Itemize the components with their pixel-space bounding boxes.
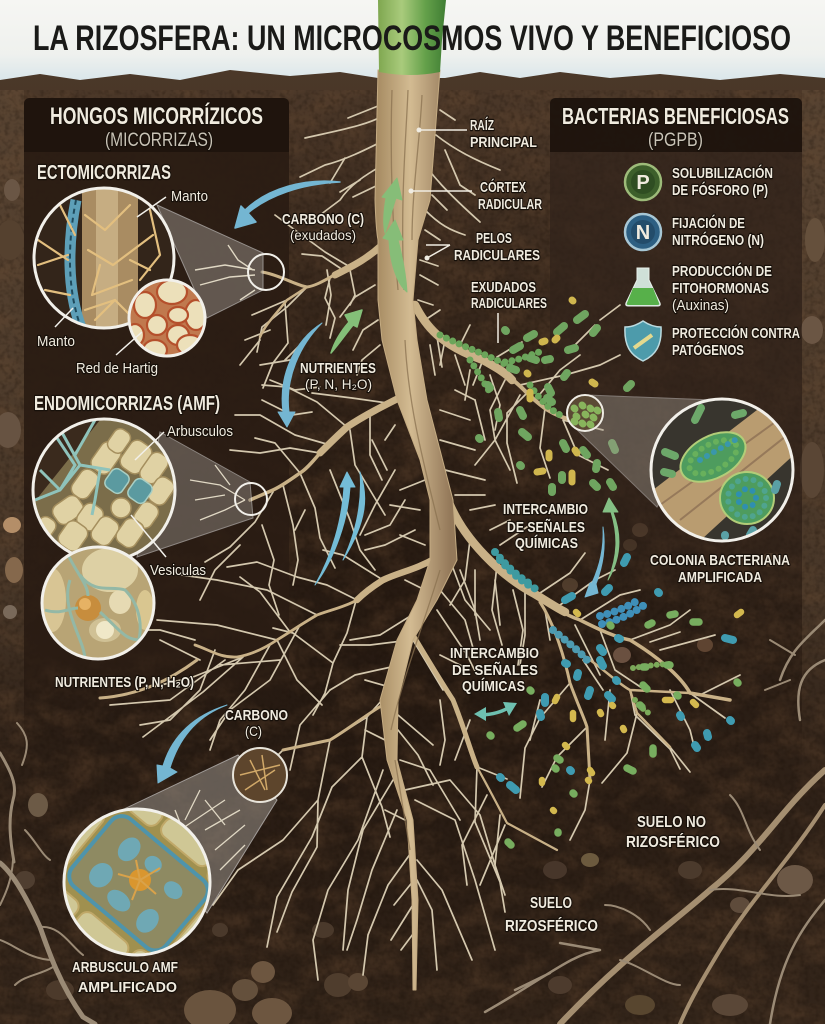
background: sky bbox=[0, 0, 825, 90]
bacteria panel heading bbox=[562, 103, 789, 151]
fungi panel heading bbox=[50, 102, 263, 151]
label: raíz principal bbox=[470, 117, 537, 151]
callouts: ectomicorrizas: Red de Hartig bbox=[76, 361, 158, 377]
root callouts bbox=[408, 128, 498, 343]
label: nutrientes centro: (P, N, H₂O) bbox=[305, 376, 372, 392]
text: fijación: FIJACIÓN DE bbox=[672, 214, 745, 232]
label: suelo rizosférico bbox=[505, 895, 598, 935]
plant stem bbox=[378, 0, 446, 75]
zoom cone: ectomicorrizas bbox=[157, 205, 263, 318]
text: solubilización: DE FÓSFORO (P) bbox=[672, 181, 768, 199]
icon: nitrógeno: N bbox=[636, 222, 650, 244]
label: córtex radicular bbox=[478, 178, 542, 213]
label: suelo no rizosférico: RIZOSFÉRICO bbox=[626, 832, 720, 851]
icon: escudo bbox=[625, 321, 661, 361]
text: fitohormonas bbox=[672, 262, 772, 314]
heading: ectomicorrizas: ECTOMICORRIZAS bbox=[37, 162, 171, 184]
arrow: carbono inferior bbox=[157, 705, 227, 783]
magnifier: vesículas bbox=[38, 547, 154, 660]
zoom cone: colonia bacteriana bbox=[570, 395, 713, 507]
label: intercambio 1: QUÍMICAS bbox=[515, 535, 578, 552]
taproot bbox=[375, 70, 457, 990]
magnifier: root mantle bbox=[34, 185, 174, 335]
panel: bacterias beneficiosas bbox=[550, 98, 802, 608]
text: solubilización: SOLUBILIZACIÓN bbox=[672, 164, 773, 182]
label: raíz principal: RAÍZ bbox=[470, 117, 494, 134]
label: nutrientes: NUTRIENTES (P, N, H₂O) bbox=[55, 674, 194, 691]
label: carbono inferior: (C) bbox=[245, 723, 262, 739]
label: carbono exudados: (exudados) bbox=[290, 227, 356, 243]
text: fijación bbox=[672, 214, 764, 249]
icon: nitrógeno bbox=[625, 214, 661, 250]
icon: fósforo bbox=[625, 164, 661, 200]
label: colonia bacteriana bbox=[650, 552, 790, 586]
text: protección: PATÓGENOS bbox=[672, 341, 744, 359]
magnifier: arbusculos bbox=[32, 418, 176, 557]
text: solubilización bbox=[672, 164, 773, 199]
label: exudados radiculares: EXUDADOS bbox=[471, 279, 536, 296]
label: carbono exudados bbox=[282, 211, 364, 243]
label: intercambio 1 bbox=[503, 501, 588, 552]
label: arbusculo amf amplificado: AMPLIFICADO bbox=[78, 979, 177, 996]
label: arbusculo amf amplificado bbox=[72, 959, 178, 996]
target circle: colonia bbox=[567, 395, 603, 431]
bacteria panel heading: (PGPB) bbox=[648, 130, 703, 151]
callouts: ectomicorrizas: Manto bbox=[37, 334, 75, 350]
label: colonia bacteriana: AMPLIFICADA bbox=[678, 569, 762, 586]
zoom cone: endomicorrizas bbox=[137, 432, 253, 557]
label: colonia bacteriana: COLONIA BACTERIANA bbox=[650, 552, 790, 569]
label: intercambio 1: DE SEÑALES bbox=[507, 518, 585, 536]
label: carbono inferior bbox=[225, 707, 288, 739]
label: intercambio 2: INTERCAMBIO bbox=[450, 645, 539, 662]
label: suelo rizosférico: SUELO bbox=[530, 895, 572, 912]
icon: matraz bbox=[626, 268, 660, 306]
magnifier: colonia bacteriana bbox=[650, 398, 794, 542]
label: intercambio 2 bbox=[450, 645, 539, 695]
target circle: ectomicorrizas bbox=[248, 254, 284, 290]
label: intercambio 2: QUÍMICAS bbox=[462, 678, 525, 695]
target circle: endomicorrizas bbox=[235, 483, 267, 515]
text: fijación: NITRÓGENO (N) bbox=[672, 231, 764, 249]
heading: endomicorrizas: ENDOMICORRIZAS (AMF) bbox=[34, 393, 220, 415]
label: suelo no rizosférico: SUELO NO bbox=[637, 814, 706, 831]
label: arbusculo amf amplificado: ARBUSCULO AMF bbox=[72, 959, 178, 976]
callouts: endomicorrizas: Arbusculos bbox=[167, 424, 233, 440]
text: protección bbox=[672, 324, 800, 359]
corner roots bbox=[0, 620, 825, 1024]
zoom cone: arbusculo amplificado bbox=[122, 755, 277, 913]
callouts: endomicorrizas: Vesiculas bbox=[150, 563, 206, 579]
icon: fósforo: P bbox=[636, 172, 650, 194]
arrow: nutrientes hacia hifas bbox=[278, 323, 322, 427]
label: intercambio 2: DE SEÑALES bbox=[452, 661, 538, 679]
arrow: nutrientes hacia raíz bbox=[331, 310, 362, 353]
panel: hongos micorrízicos bbox=[24, 98, 289, 713]
label: carbono exudados: CARBONO (C) bbox=[282, 211, 364, 228]
label: pelos radiculares bbox=[454, 230, 540, 264]
label: suelo rizosférico: RIZOSFÉRICO bbox=[505, 916, 598, 935]
callouts: ectomicorrizas bbox=[37, 189, 208, 377]
arrow: intercambio 2 bbox=[474, 702, 517, 721]
callouts: ectomicorrizas: Manto bbox=[171, 189, 208, 205]
target circle: arbusculo bbox=[233, 748, 287, 802]
arrows: córtex bbox=[382, 178, 407, 292]
fungi panel heading: HONGOS MICORRÍZICOS bbox=[50, 102, 263, 130]
text: fitohormonas: PRODUCCIÓN DE bbox=[672, 262, 772, 280]
fungi panel heading: (MICORRIZAS) bbox=[105, 130, 213, 151]
label: pelos radiculares: RADICULARES bbox=[454, 247, 540, 264]
bacteria colonies on roots bbox=[440, 300, 741, 845]
label: nutrientes centro: NUTRIENTES bbox=[300, 360, 376, 377]
magnifier: red de Hartig bbox=[126, 280, 207, 360]
label: nutrientes centro bbox=[300, 360, 376, 392]
arrows: endomicorrizas bbox=[315, 472, 365, 585]
text: fitohormonas: FITOHORMONAS bbox=[672, 280, 769, 297]
arrow: carbono exudados bbox=[235, 181, 340, 228]
label: córtex radicular: CÓRTEX bbox=[480, 178, 526, 196]
rootlets bbox=[110, 106, 740, 980]
callouts: endomicorrizas bbox=[131, 424, 233, 579]
label: carbono inferior: CARBONO bbox=[225, 707, 288, 724]
label: suelo no rizosférico bbox=[626, 814, 720, 851]
label: intercambio 1: INTERCAMBIO bbox=[503, 501, 588, 518]
lateral roots bbox=[100, 245, 730, 850]
label: raíz principal: PRINCIPAL bbox=[470, 134, 537, 151]
magnifier: arbusculo AMF amplificado bbox=[62, 808, 212, 956]
label: exudados radiculares bbox=[471, 279, 547, 312]
label: pelos radiculares: PELOS bbox=[476, 230, 512, 247]
arrows: intercambio 1 bbox=[585, 498, 619, 597]
text: fitohormonas: (Auxinas) bbox=[672, 298, 729, 314]
label: exudados radiculares: RADICULARES bbox=[471, 295, 547, 312]
label: córtex radicular: RADICULAR bbox=[478, 196, 542, 213]
